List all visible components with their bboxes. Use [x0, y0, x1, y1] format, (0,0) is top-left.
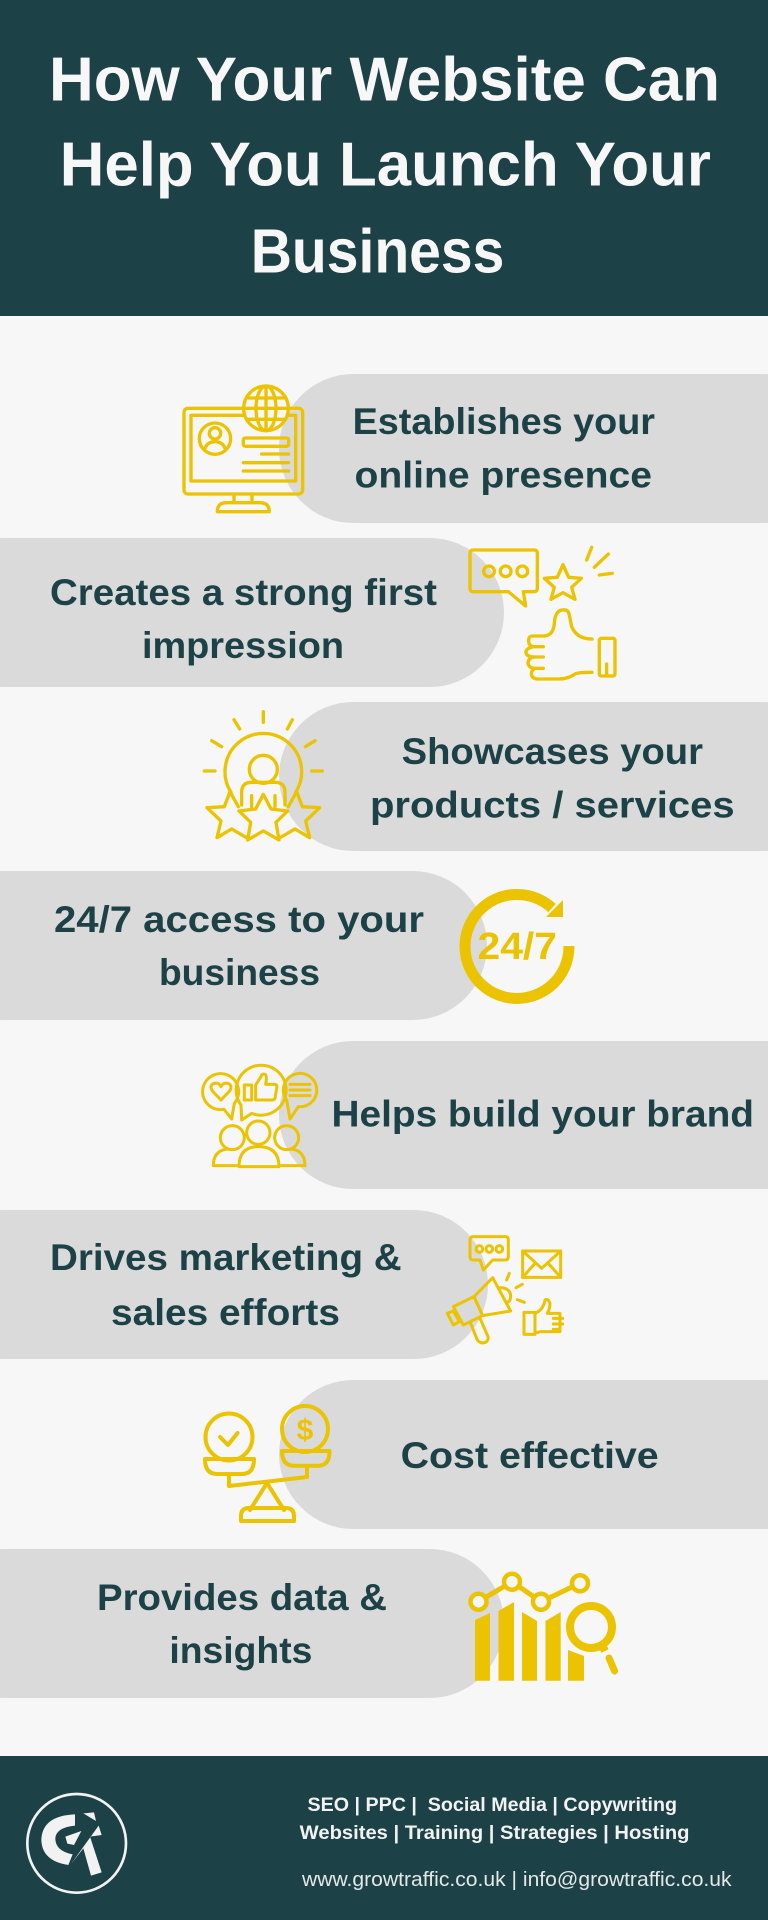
text: creates a strong first impression: [50, 572, 437, 666]
text: provides data and insights: insights: [169, 1630, 312, 1671]
text: creates a strong first impression: impression: [142, 625, 344, 666]
pill 4: [0, 871, 487, 1020]
icon: megaphone, bubble, envelope, thumb: [447, 1237, 563, 1343]
footer services text: SEO | PPC | Social Media | Copywriting: [308, 1795, 677, 1816]
icon: 24/7 clock arrow: 24/7: [478, 926, 557, 968]
text: cost effective: Cost effective: [401, 1435, 659, 1476]
text: provides data and insights: Provides data &: [97, 1577, 387, 1618]
icon: people with speech bubbles: [203, 1065, 317, 1167]
pill 5: [279, 1041, 768, 1189]
icon: balance scale with coins: [205, 1406, 330, 1521]
title: Help You Launch Your: [60, 131, 711, 200]
header panel: [0, 0, 768, 316]
text: 24/7 access to your business: [54, 899, 424, 993]
text: provides data and insights: [97, 1577, 387, 1671]
text: creates a strong first impression: Creates a strong first: [50, 572, 437, 613]
text: drives marketing and sales efforts: sales efforts: [111, 1292, 340, 1333]
text: drives marketing and sales efforts: [50, 1237, 402, 1333]
icon: person in light bulb with stars: [204, 712, 322, 840]
footer contact text: www.growtraffic.co.uk | info@growtraffic.co.uk: [301, 1869, 733, 1891]
icon: speech bubble, star and thumbs up: [470, 547, 615, 679]
icon: 24/7 clock arrow: [465, 894, 569, 998]
title: How Your Website Can: [49, 46, 720, 115]
text: establishes your online presence: online presence: [354, 455, 652, 496]
row 3: products and services: [204, 702, 768, 851]
text: 24/7 access to your business: business: [159, 952, 320, 993]
text: showcases your products / services: [370, 731, 735, 826]
footer services text: [300, 1795, 690, 1844]
icon: bar chart with magnifier: [470, 1574, 615, 1681]
pill 2: [0, 538, 504, 687]
title: Business: [251, 217, 504, 286]
pill 3: [279, 702, 768, 851]
text: 24/7 access to your business: 24/7 access to your: [54, 899, 424, 940]
icon: balance scale with coins: $: [297, 1414, 314, 1447]
text: showcases your products / services: Showcases your: [402, 731, 703, 772]
text: establishes your online presence: Establishes your: [353, 401, 655, 442]
icon: monitor with globe: [184, 386, 303, 512]
text: drives marketing and sales efforts: Drives marketing &: [50, 1237, 402, 1278]
title: [49, 46, 720, 286]
text: establishes your online presence: [353, 401, 655, 496]
row 6: marketing and sales: [0, 1210, 563, 1359]
footer panel: [0, 1756, 768, 1920]
logo: [27, 1794, 126, 1893]
pill 7: [279, 1380, 768, 1529]
row 2: first impression: [0, 538, 615, 687]
pill 8: [0, 1549, 504, 1698]
row 8: data and insights: [0, 1549, 615, 1698]
row 1: online presence: [184, 374, 768, 523]
row 7: cost effective: [205, 1380, 768, 1529]
row 5: build your brand: [203, 1041, 768, 1189]
row 4: 24/7 access: [0, 871, 569, 1020]
pill 1: [279, 374, 768, 523]
text: showcases your products / services: products / services: [370, 785, 735, 826]
footer services text: Websites | Training | Strategies | Hosting: [300, 1823, 690, 1844]
pill 6: [0, 1210, 488, 1359]
text: helps build your brand: Helps build your brand: [332, 1094, 754, 1135]
